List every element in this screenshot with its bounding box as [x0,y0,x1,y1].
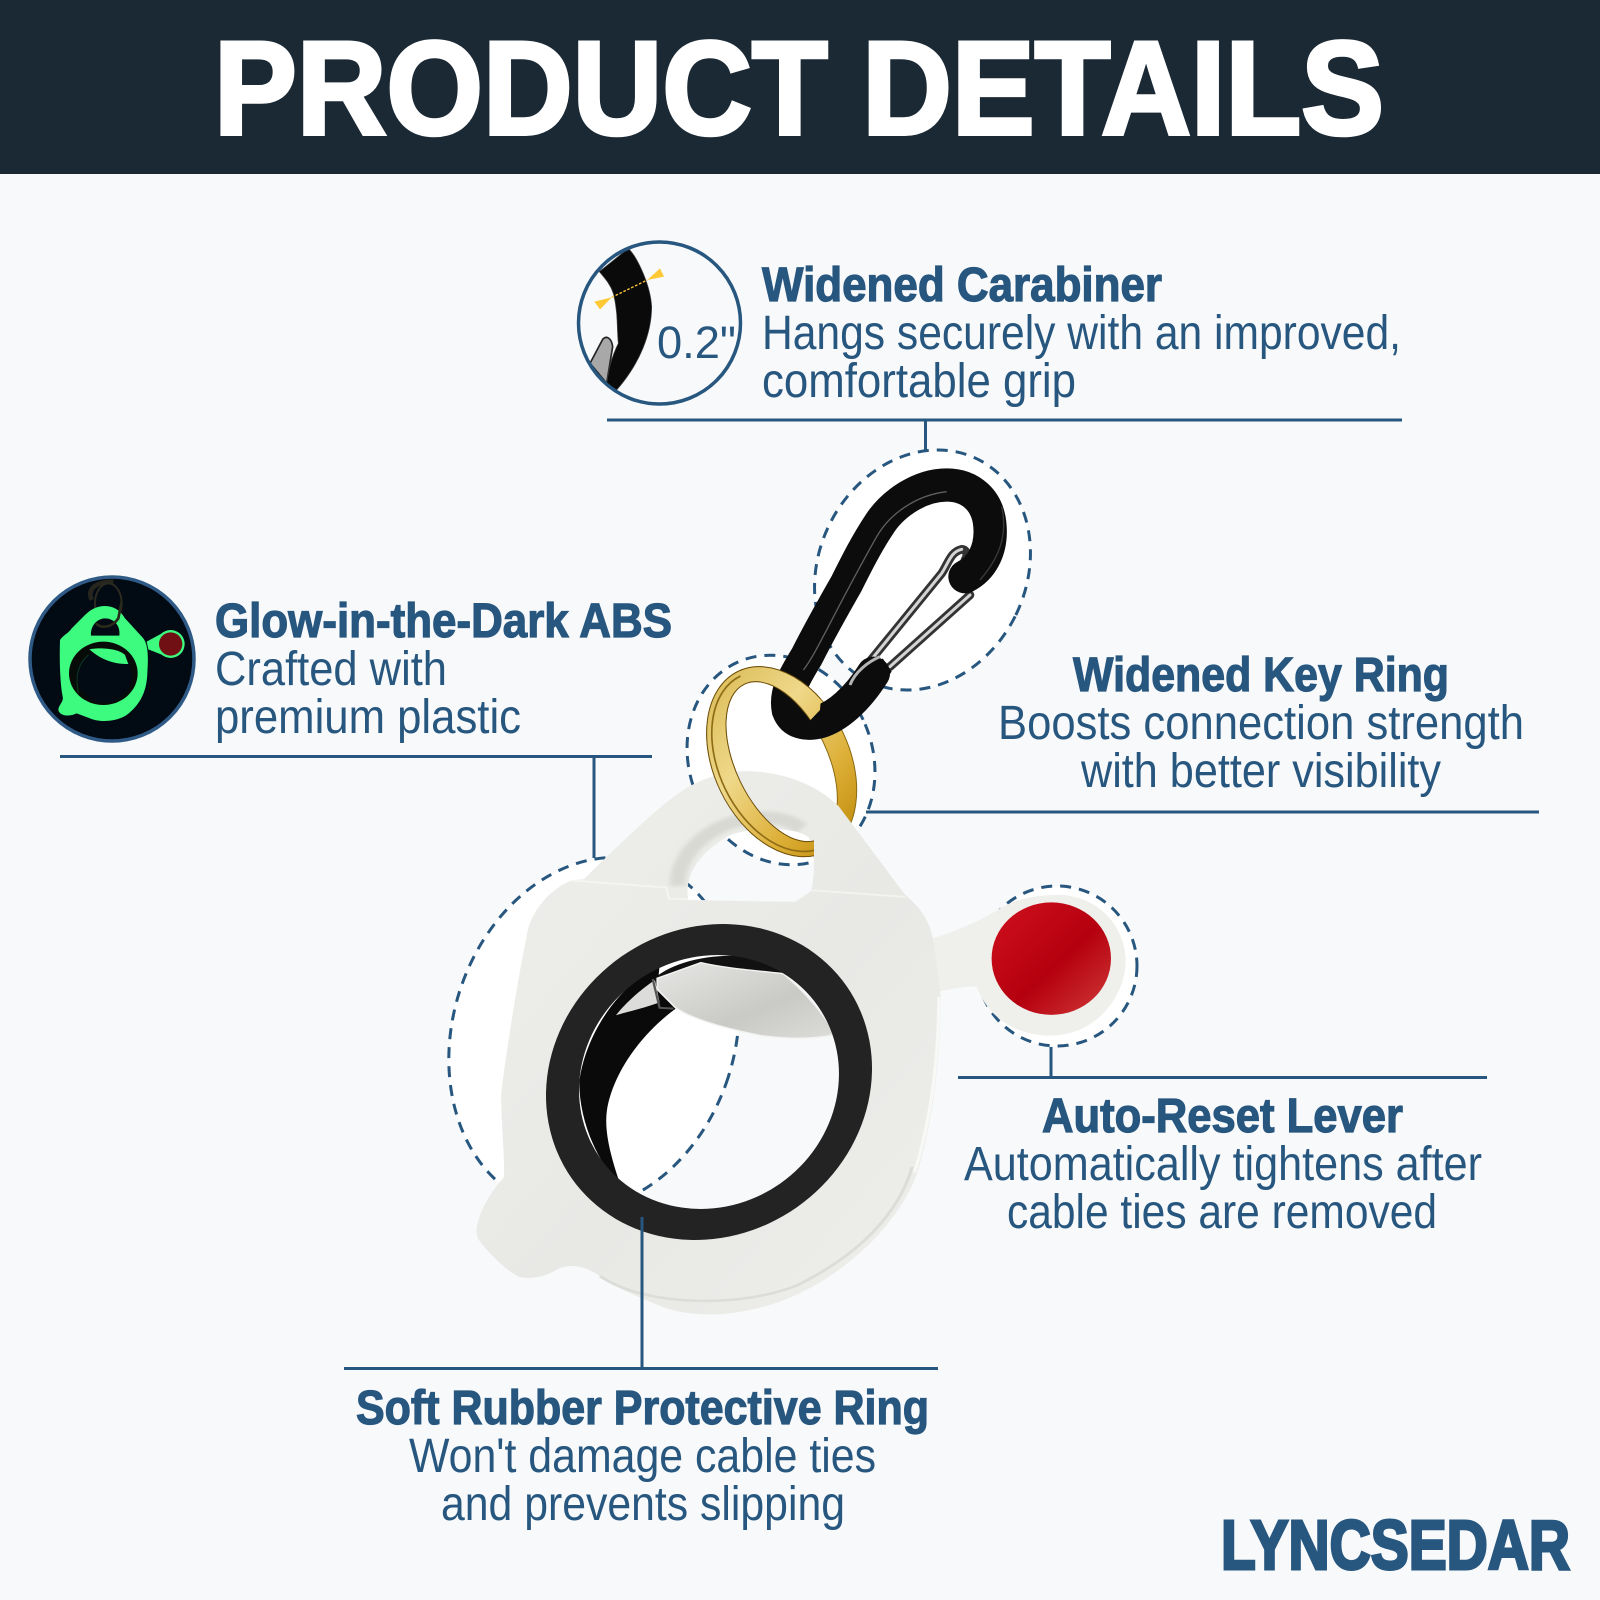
callout: soft rubber protective ring [344,1217,938,1531]
icon: glowing tag [30,577,194,741]
lever arm and head [931,895,1126,1036]
description: Automatically tightens after [964,1138,1482,1191]
description line 2: and prevents slipping [441,1478,845,1531]
heading: Widened Key Ring [1073,649,1449,702]
leader line [866,810,1539,814]
heading: Widened Carabiner [762,259,1162,312]
description line 2: comfortable grip [762,355,1076,408]
key ring front half [706,666,821,858]
key ring rear half [677,642,886,881]
wire gate [853,549,970,682]
icon: carabiner width detail [578,242,740,404]
gate rivet [850,657,880,685]
callout: widened carabiner [578,242,1402,451]
description: Hangs securely with an improved, [762,307,1401,360]
product: carabiner, key ring and glow tag [477,485,1126,1314]
heading: Auto-Reset Lever [1042,1090,1403,1143]
callout: auto-reset lever [958,1047,1487,1239]
description: Won't damage cable ties [409,1430,876,1483]
dashed highlight zones [404,413,1137,1249]
leader line [344,1217,938,1368]
heading: Glow-in-the-Dark ABS [215,595,672,648]
title: PRODUCT DETAILS [214,15,1384,163]
heading: Soft Rubber Protective Ring [356,1382,929,1435]
description: Boosts connection strength [998,697,1524,750]
red indicator disc [992,902,1111,1015]
black rubber ring [484,860,934,1304]
description line 2: cable ties are removed [1007,1186,1437,1239]
description line 2: premium plastic [215,691,521,744]
callout: widened key ring [866,649,1539,812]
carabiner [788,485,1004,723]
callout: glow in the dark [30,577,672,858]
leader line [958,1047,1487,1078]
inner opening wall and airtag leaf [579,956,835,1185]
description: Crafted with [215,643,447,696]
title banner [0,0,1600,174]
icon: carabiner width detail: 0.2" [657,317,736,368]
tag body [477,771,941,1314]
description line 2: with better visibility [1080,745,1441,798]
leader line [60,756,652,858]
leader line [607,420,1402,451]
